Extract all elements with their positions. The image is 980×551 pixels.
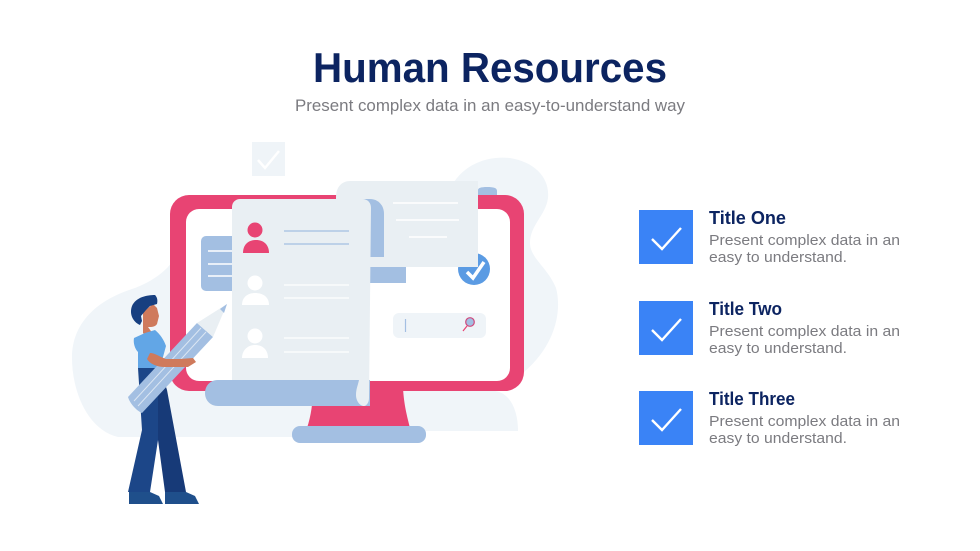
title: Human Resources xyxy=(313,44,667,91)
shirt xyxy=(134,330,166,368)
item 3 text: easy to understand. xyxy=(709,430,847,447)
monitor frame xyxy=(170,195,524,391)
monitor screen xyxy=(186,209,510,381)
shoes xyxy=(129,492,199,504)
check mark xyxy=(467,262,484,278)
blue panel behind document xyxy=(340,199,384,257)
profile row 2 xyxy=(242,276,349,305)
item 2 xyxy=(639,298,900,357)
subtitle: Present complex data in an easy-to-understand way xyxy=(295,96,685,115)
item 1 title: Title One xyxy=(709,207,786,228)
hair xyxy=(131,295,157,325)
monitor stand xyxy=(307,388,410,428)
person with pencil xyxy=(128,295,227,504)
item 1 text: easy to understand. xyxy=(709,249,847,266)
checkbox 3 xyxy=(639,391,693,445)
item 2 text: Present complex data in an xyxy=(709,323,900,340)
item 2 text: easy to understand. xyxy=(709,340,847,357)
search box xyxy=(393,313,486,338)
document sheet xyxy=(232,199,371,406)
neck and face xyxy=(143,304,159,337)
checkbox 2 xyxy=(639,301,693,355)
small blue tab xyxy=(478,187,497,195)
profile row 1 xyxy=(243,222,349,253)
background blob: lower right xyxy=(400,391,518,431)
pencil body xyxy=(128,323,213,413)
small blue rectangle xyxy=(365,267,406,283)
item 2 title: Title Two xyxy=(709,298,782,319)
background blob: right xyxy=(452,158,558,372)
checkbox 1 xyxy=(639,210,693,264)
monitor base xyxy=(292,426,426,443)
rear leg xyxy=(143,368,186,492)
background blob: left xyxy=(72,262,410,437)
pencil tip xyxy=(197,304,227,337)
item 1 text: Present complex data in an xyxy=(709,232,900,249)
item 3 text: Present complex data in an xyxy=(709,413,900,430)
grey note card xyxy=(336,181,478,267)
faint checkbox xyxy=(252,142,285,176)
arm xyxy=(147,353,196,367)
profile row 3 xyxy=(242,328,349,358)
item 3 title: Title Three xyxy=(709,388,795,409)
check circle xyxy=(458,253,490,285)
front leg xyxy=(128,368,158,492)
item 1 xyxy=(639,207,900,266)
left blue list card xyxy=(201,236,241,291)
item 3 xyxy=(639,388,900,447)
monitor xyxy=(170,195,524,443)
document scroll base xyxy=(205,380,370,406)
